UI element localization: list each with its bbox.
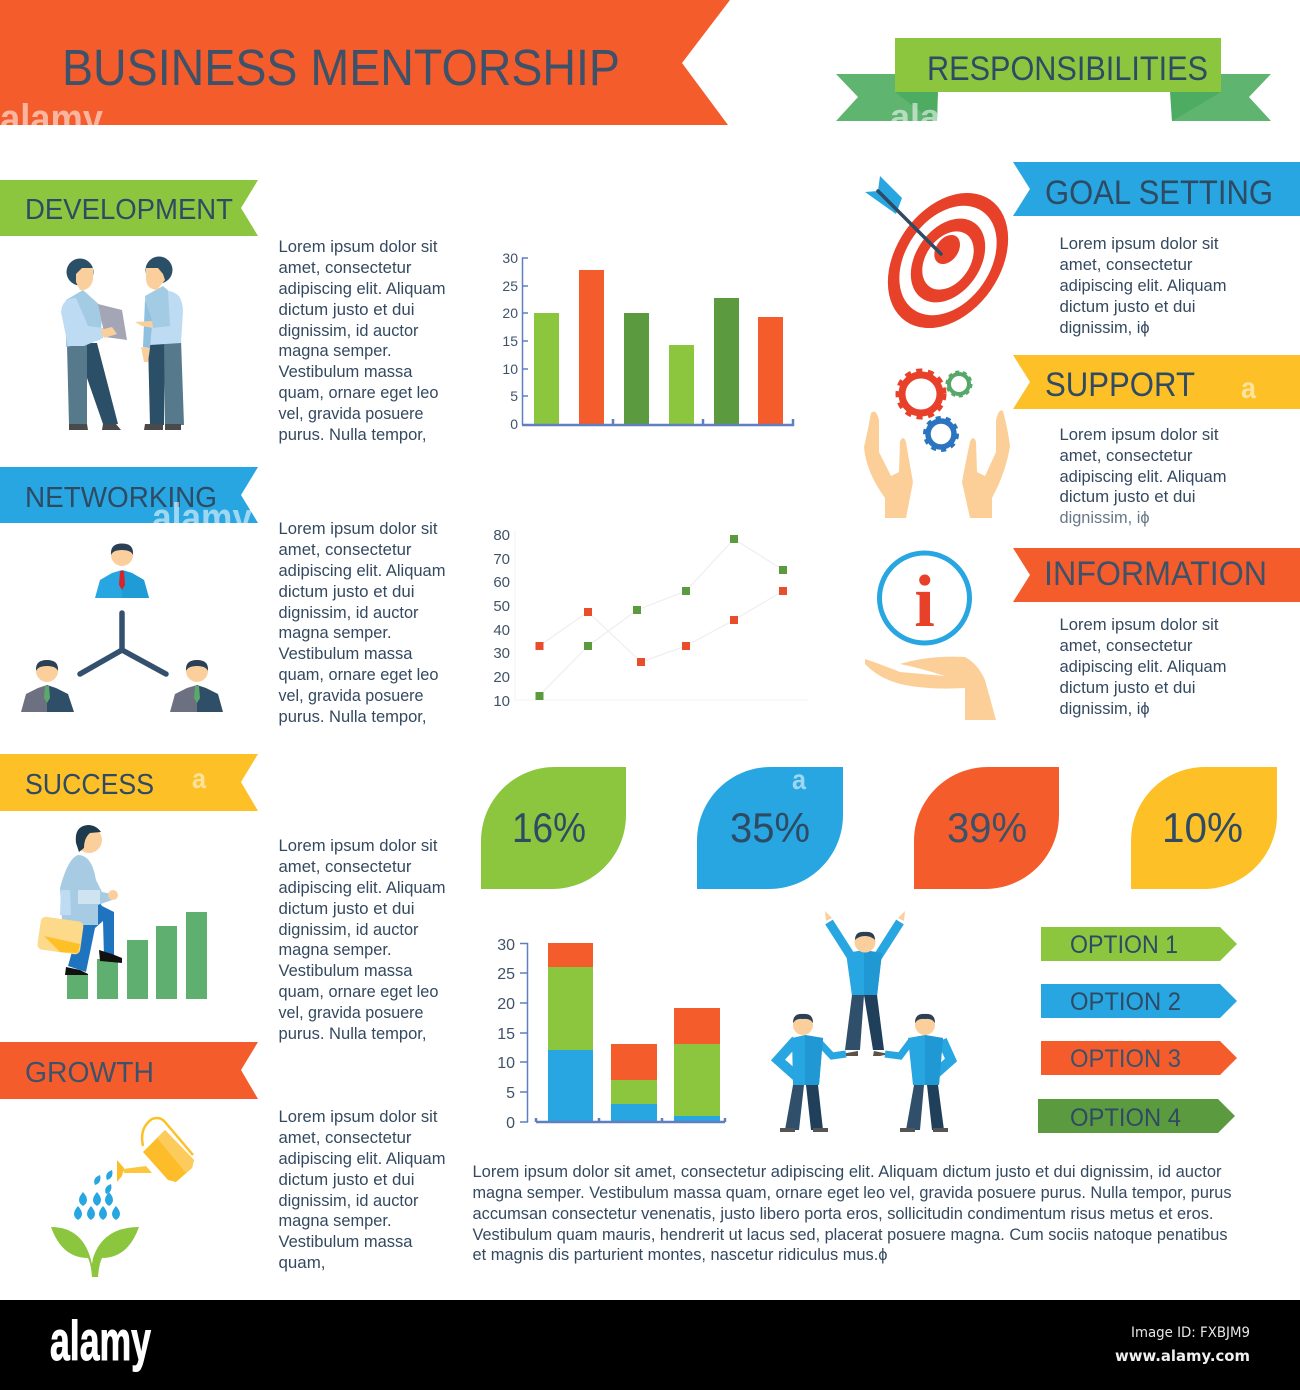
- percent leaf: 16%: [481, 767, 626, 889]
- text block: networking: magna semper.: [278, 624, 392, 642]
- text block: goal setting: Lorem ipsum dolor sit: [1060, 235, 1219, 253]
- text block: growth: adipiscing elit. Aliquam: [278, 1150, 446, 1168]
- text block: success: dictum justo et dui: [278, 900, 414, 918]
- text block: development: purus. Nulla tempor,: [278, 426, 426, 444]
- percent leaf: 35%: a: [792, 764, 806, 795]
- text block: success: quam, ornare eget leo: [278, 983, 438, 1001]
- banner: success: [0, 754, 258, 811]
- text block: development: vel, gravida posuere: [278, 405, 424, 423]
- paragraph: bottom summary: [472, 1163, 1232, 1264]
- percent leaf: 10%: 10%: [1162, 804, 1243, 851]
- text block: development: adipiscing elit. Aliquam: [278, 280, 446, 298]
- text block: support: dictum justo et dui: [1060, 488, 1196, 506]
- text block: networking: dictum justo et dui: [278, 583, 414, 601]
- icon: hands with gears: [864, 371, 1010, 518]
- text block: growth: Lorem ipsum dolor sit: [278, 1108, 438, 1126]
- text block: support: dignissim, iϕ: [1060, 509, 1150, 527]
- responsibilities ribbon: ala: [890, 98, 941, 136]
- footer: watermark bar: alamy: [50, 1309, 151, 1372]
- banner: development: [0, 180, 258, 236]
- top person: [95, 544, 149, 598]
- percent leaf: 10%: [1131, 767, 1277, 889]
- legend arrow: option 3: [1041, 1041, 1237, 1075]
- connector: [80, 613, 166, 674]
- text block: goal setting: adipiscing elit. Aliquam: [1060, 277, 1226, 295]
- title banner: BUSINESS MENTORSHIP: [62, 39, 620, 96]
- left person: [21, 660, 74, 712]
- text block: growth: dignissim, id auctor: [278, 1192, 419, 1210]
- text block: goal setting: dignissim, iϕ: [1060, 319, 1150, 337]
- responsibilities ribbon: [836, 38, 1271, 121]
- text block: development: Lorem ipsum dolor sit: [278, 238, 438, 256]
- hands: [864, 410, 1010, 518]
- text block: networking: purus. Nulla tempor,: [278, 708, 426, 726]
- text block: support: adipiscing elit. Aliquam: [1060, 468, 1226, 486]
- text block: success: dignissim, id auctor: [278, 921, 419, 939]
- text block: success: [278, 837, 446, 1043]
- banner: support: [1013, 355, 1300, 409]
- text block: development: amet, consectetur: [278, 259, 412, 277]
- bar chart: six columns: [502, 250, 793, 432]
- text block: development: magna semper.: [278, 342, 392, 360]
- percent leaf: 35%: [697, 764, 843, 889]
- left man: [778, 1014, 846, 1132]
- gears: [898, 371, 971, 450]
- stacked bar chart: 0: [506, 1115, 515, 1132]
- text block: networking: vel, gravida posuere: [278, 687, 424, 705]
- text block: goal setting: amet, consectetur: [1060, 256, 1193, 274]
- banner: information: [1013, 548, 1300, 602]
- text block: growth: quam,: [278, 1254, 326, 1272]
- text block: support: Lorem ipsum dolor sit: [1060, 426, 1219, 444]
- line chart: 20: [493, 669, 510, 686]
- text block: goal setting: [1060, 235, 1226, 337]
- text block: growth: dictum justo et dui: [278, 1171, 414, 1189]
- top man: [825, 911, 905, 1056]
- text block: success: magna semper.: [278, 941, 392, 959]
- text block: goal setting: dictum justo et dui: [1060, 298, 1196, 316]
- text block: growth: [278, 1108, 446, 1272]
- text block: networking: adipiscing elit. Aliquam: [278, 562, 446, 580]
- icon: information in hand: [865, 553, 996, 720]
- text block: success: adipiscing elit. Aliquam: [278, 879, 446, 897]
- paragraph: bottom summary: accumsan consectetur venenatis, justo libero porta eros, sollicitudin condimentum risus metus et eros.: [472, 1205, 1214, 1223]
- banner: goal setting: [1013, 162, 1300, 216]
- banner: success: SUCCESS: [25, 769, 154, 801]
- bar chart: six columns: 10: [502, 361, 518, 377]
- banner: goal setting: GOAL SETTING: [1045, 174, 1273, 212]
- icon: network of three people: [21, 544, 223, 712]
- stacked bar chart: 20: [497, 996, 515, 1013]
- line chart: 60: [493, 574, 510, 591]
- percent leaf: 39%: 39%: [947, 804, 1027, 851]
- paragraph: bottom summary: Lorem ipsum dolor sit amet, consectetur adipiscing elit. Aliquam dictum justo et dui dignissim, id auctor: [472, 1163, 1222, 1181]
- text block: support: amet, consectetur: [1060, 447, 1193, 465]
- paragraph: bottom summary: magna semper. Vestibulum massa quam, ornare eget leo vel, gravida posuere purus. Nulla tempor, purus: [472, 1184, 1232, 1202]
- footer: watermark bar: www.alamy.com: [1115, 1347, 1250, 1365]
- text block: development: quam, ornare eget leo: [278, 384, 438, 402]
- legend arrow: option 4: OPTION 4: [1070, 1104, 1181, 1132]
- percent leaf: 16%: 16%: [512, 804, 586, 851]
- banner: growth: GROWTH: [25, 1057, 154, 1089]
- text block: networking: amet, consectetur: [278, 541, 412, 559]
- icon: information in hand: i: [914, 561, 935, 643]
- banner: networking: [0, 467, 258, 523]
- text block: development: [278, 238, 446, 444]
- title banner: alamy: [0, 97, 104, 141]
- line chart: 10: [493, 693, 510, 710]
- icon: target with arrow: [863, 170, 1033, 351]
- bar chart: six columns: 25: [502, 278, 518, 294]
- legend arrow: option 3: OPTION 3: [1070, 1045, 1181, 1073]
- text block: information: dignissim, iϕ: [1060, 700, 1150, 718]
- text block: information: dictum justo et dui: [1060, 679, 1196, 697]
- paragraph: bottom summary: et magnis dis parturient montes, nascetur ridiculus mus.ϕ: [472, 1246, 888, 1264]
- text block: information: amet, consectetur: [1060, 637, 1193, 655]
- text block: development: Vestibulum massa: [278, 363, 413, 381]
- line chart: 50: [493, 598, 510, 615]
- text block: development: dictum justo et dui: [278, 301, 414, 319]
- text block: information: [1060, 616, 1226, 718]
- text block: networking: Lorem ipsum dolor sit: [278, 520, 438, 538]
- text block: growth: Vestibulum massa: [278, 1233, 413, 1251]
- stacked bar chart: 10: [497, 1055, 515, 1072]
- right person: [170, 660, 223, 712]
- stacked bar chart: 15: [497, 1026, 515, 1043]
- text block: success: purus. Nulla tempor,: [278, 1025, 426, 1043]
- line chart: 70: [493, 551, 510, 568]
- legend arrow: option 1: [1041, 927, 1237, 961]
- bar chart: six columns: 15: [502, 333, 518, 349]
- text block: growth: magna semper.: [278, 1212, 392, 1230]
- line chart: 40: [493, 622, 510, 639]
- text block: growth: amet, consectetur: [278, 1129, 412, 1147]
- paragraph: bottom summary: Vestibulum quam mauris, hendrerit ut lacus sed, placerat posuere magna. Cum sociis natoque penatibus: [472, 1226, 1228, 1244]
- stacked bar chart: [497, 937, 725, 1132]
- icon: watering can and sprout: [51, 1118, 194, 1277]
- title banner: [0, 0, 730, 125]
- legend arrow: option 1: OPTION 1: [1070, 931, 1178, 959]
- responsibilities ribbon: RESPONSIBILITIES: [927, 50, 1208, 88]
- percent leaf: 39%: [914, 767, 1059, 889]
- bar chart: six columns: 0: [510, 416, 518, 432]
- stacked bar chart: 30: [497, 937, 515, 954]
- banner: growth: [0, 1042, 258, 1099]
- text block: networking: quam, ornare eget leo: [278, 666, 438, 684]
- banner: networking: alamy: [152, 496, 253, 540]
- banner: support: a: [1241, 372, 1256, 405]
- text block: success: amet, consectetur: [278, 858, 412, 876]
- footer: watermark bar: Image ID: FXBJM9: [1131, 1325, 1250, 1341]
- icon: two men talking: [61, 256, 184, 430]
- legend arrow: option 4: [1038, 1099, 1235, 1133]
- legend arrow: option 2: [1041, 984, 1237, 1018]
- stacked bar chart: 5: [506, 1085, 515, 1102]
- text block: information: adipiscing elit. Aliquam: [1060, 658, 1226, 676]
- bar chart: six columns: 30: [502, 250, 518, 266]
- line chart: 30: [493, 645, 510, 662]
- text block: information: Lorem ipsum dolor sit: [1060, 616, 1219, 634]
- bar chart: six columns: 20: [502, 305, 518, 321]
- footer: watermark bar: [0, 1300, 1300, 1390]
- legend arrow: option 2: OPTION 2: [1070, 988, 1181, 1016]
- line chart: 80: [493, 527, 510, 544]
- text block: networking: dignissim, id auctor: [278, 604, 419, 622]
- text block: success: Lorem ipsum dolor sit: [278, 837, 438, 855]
- icon: man climbing bar steps: [37, 825, 207, 999]
- line chart: [493, 527, 808, 710]
- stacked bar chart: 25: [497, 966, 515, 983]
- icon: three businessmen team pyramid: [778, 911, 951, 1132]
- banner: information: INFORMATION: [1044, 555, 1267, 593]
- text block: development: dignissim, id auctor: [278, 322, 419, 340]
- text block: support: [1060, 426, 1226, 527]
- bar chart: six columns: 5: [510, 388, 518, 404]
- text block: success: Vestibulum massa: [278, 962, 413, 980]
- banner: success: a: [192, 763, 206, 794]
- percent leaf: 35%: 35%: [730, 804, 810, 851]
- text block: networking: [278, 520, 446, 726]
- banner: development: DEVELOPMENT: [25, 194, 233, 226]
- text block: success: vel, gravida posuere: [278, 1004, 424, 1022]
- right man: [885, 1014, 951, 1132]
- banner: networking: NETWORKING: [25, 482, 217, 514]
- text block: networking: Vestibulum massa: [278, 645, 413, 663]
- banner: support: SUPPORT: [1045, 366, 1195, 404]
